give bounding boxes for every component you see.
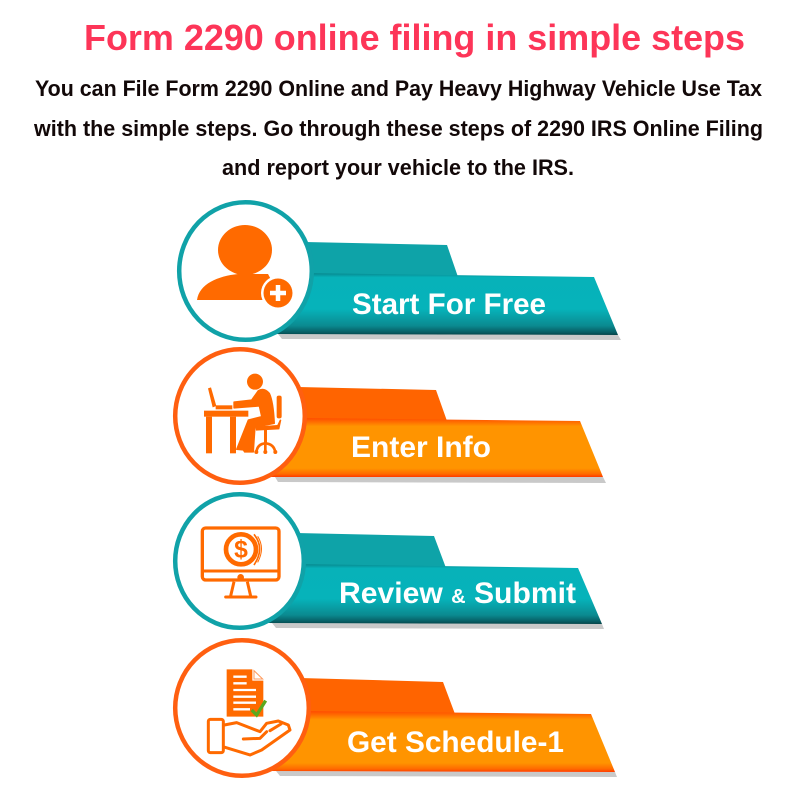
intro text: You can File Form 2290 Online and Pay Heavy Highway Vehicle Use Tax bbox=[35, 76, 763, 101]
step 1: start for free bbox=[179, 202, 621, 340]
label: Review & Submit bbox=[339, 577, 576, 610]
icon: person at desk bbox=[175, 349, 305, 483]
label: Get Schedule-1 bbox=[347, 726, 564, 759]
intro text: with the simple steps. Go through these steps of 2290 IRS Online Filing bbox=[33, 116, 763, 141]
intro text: and report your vehicle to the IRS. bbox=[222, 155, 574, 180]
step 4: get schedule-1 bbox=[175, 640, 617, 777]
icon: person with plus bbox=[179, 202, 312, 340]
label: Enter Info bbox=[351, 431, 491, 464]
step 3: review and submit bbox=[175, 494, 604, 629]
title: Form 2290 online filing in simple steps bbox=[84, 17, 745, 58]
label: Start For Free bbox=[352, 288, 546, 321]
icon: hand holding document bbox=[175, 640, 309, 776]
icon: monitor with dollar coin: $ bbox=[234, 537, 248, 564]
icon: monitor with dollar coin bbox=[175, 494, 304, 628]
intro text bbox=[33, 76, 763, 180]
step 2: enter info bbox=[175, 349, 606, 483]
